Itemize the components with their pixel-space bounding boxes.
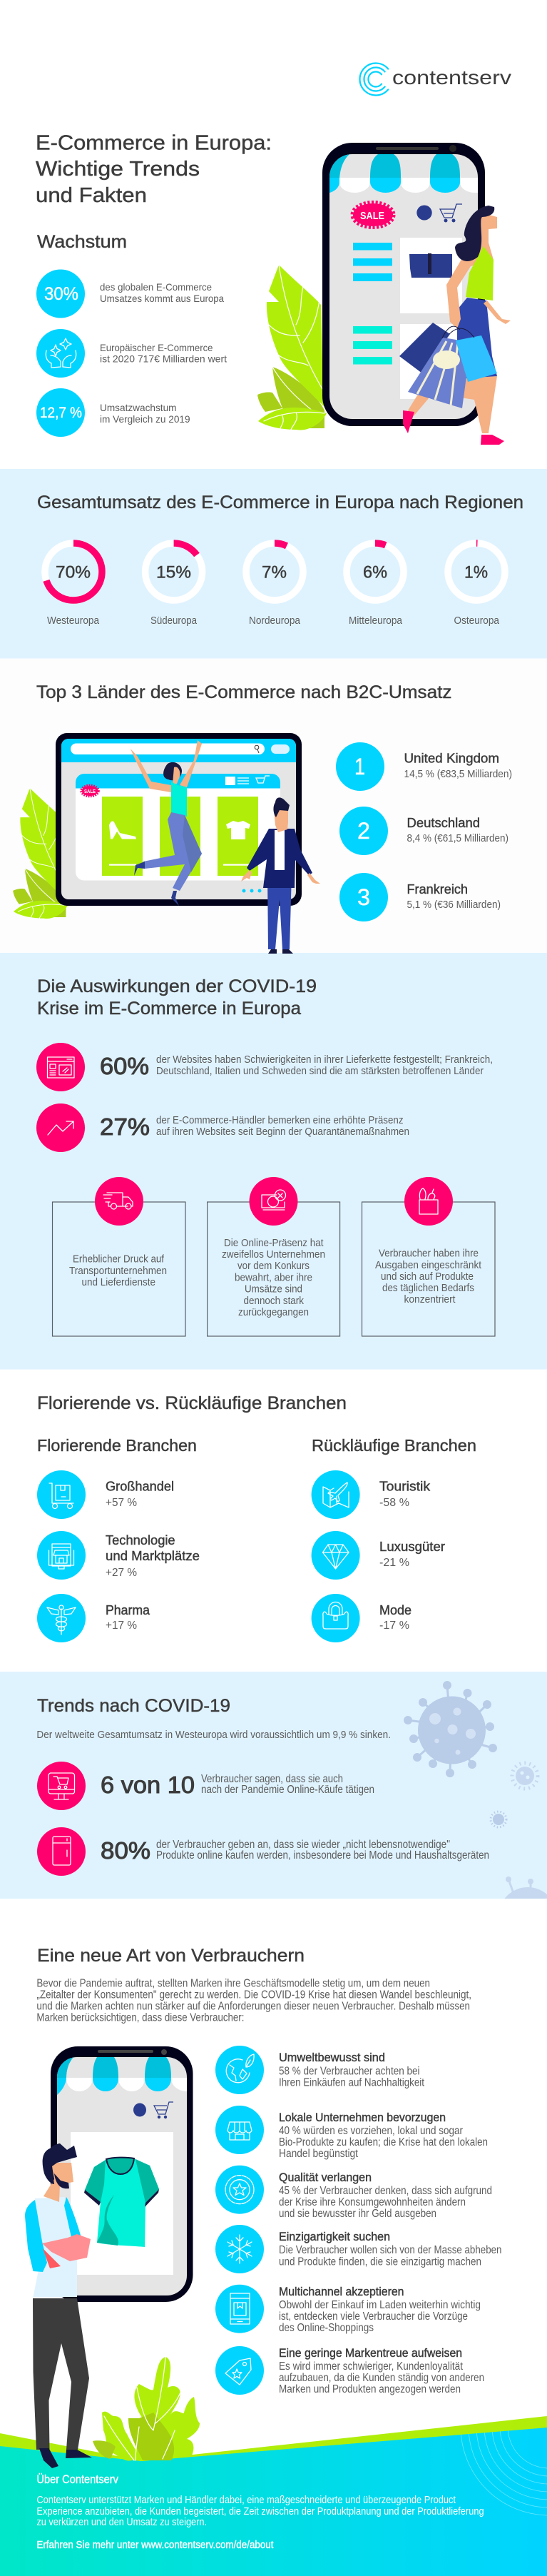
card: online presence: vor dem Konkurs [237,1260,310,1272]
rank: United Kingdom: United Kingdom [404,751,499,765]
stat: 60 percent: der Websites haben Schwierigkeiten in ihrer Lieferkette festgestellt; Frankreich, [156,1054,493,1066]
stat: 30 percent: des globalen E-Commerce [100,281,212,293]
stat: 80 percent [37,1827,489,1876]
reason: accept multichannel: ist, entdecken viele Verbraucher die Vorzüge [279,2310,468,2323]
reason: seek uniqueness [215,2225,502,2273]
title [36,131,272,207]
icon: rising trend [48,1121,73,1135]
stat: 60 percent [36,1043,493,1091]
reason: environmentally aware: Umweltbewusst sind [279,2051,385,2064]
title: und Fakten [36,184,147,207]
reason: seek uniqueness: Einzigartigkeit suchen [279,2230,390,2243]
reason: local businesses: Handel begünstigt [279,2148,359,2160]
text: intro paragraph [36,1978,471,2024]
heading: COVID-19 impact: Die Auswirkungen der COVID-19 [37,976,317,996]
reason: low brand loyalty: Marken und Produkten angezogen werden [279,2383,461,2395]
icon: website [47,1057,74,1078]
rank: United Kingdom: 1 [354,754,365,779]
panel: thriving vs declining sectors [37,1393,476,1642]
illustration: phone with t-shirt [51,2046,193,2302]
stat: 60 percent: Deutschland, Italien und Schweden sind die am stärksten betroffenen Länder [156,1065,484,1077]
item: fashion: -17 % [379,1620,409,1632]
footer text: about Contentserv [36,2473,484,2551]
reason: environmentally aware: Ihren Einkäufen auf Nachhaltigkeit [279,2077,425,2089]
stat: 30 percent [36,270,224,318]
text: intro paragraph: Bevor die Pandemie auftrat, stellten Marken ihre Geschäftsmodelle stetig um, um dem neuen [36,1978,430,1990]
reason: demand quality: und sie bewusster ihr Geld ausgeben [279,2208,436,2220]
reason: demand quality: der Krise ihre Konsumgewohnheiten ändern [279,2196,466,2208]
panel: COVID-19 impact [0,953,547,1370]
heading: top 3 countries: Top 3 Länder des E-Commerce nach B2C-Umsatz [36,682,452,702]
donut: Südeuropa 15 percent [145,543,203,627]
footer text: about Contentserv: zu verkürzen und den Umsatz zu steigern. [36,2516,207,2528]
card: transport pressure: und Lieferdienste [81,1276,155,1288]
item: wholesale [37,1470,174,1519]
stat: 30 percent: Umsatzes kommt aus Europa [100,293,224,304]
donut: Mitteleuropa 6 percent: 6% [363,562,387,582]
item: technology and marketplaces: +27 % [106,1567,137,1579]
donut: Westeuropa 70 percent: Westeuropa [47,615,100,627]
item: tourism [312,1470,431,1519]
donut: Mitteleuropa 6 percent [347,543,404,627]
item: pharma [37,1594,150,1642]
icon: price tag [225,2358,251,2385]
card: online presence: zweifellos Unternehmen [222,1248,325,1261]
card: transport pressure: Transportunternehmen [69,1265,167,1277]
card: online presence: dennoch stark [244,1295,304,1307]
reason: environmentally aware: 58 % der Verbraucher achten bei [279,2066,419,2078]
item: technology and marketplaces: und Marktplätze [106,1549,200,1563]
text: intro paragraph: Marken berücksichtigen, dass diese Verbraucher: [36,2012,244,2024]
item: technology and marketplaces: Technologie [106,1533,175,1547]
stat: 12,7 percent: Umsatzwachstum [100,402,177,413]
reason: environmentally aware [215,2046,425,2094]
icon: grocery bag [419,1188,438,1214]
heading: COVID-19 impact: Krise im E-Commerce in Europa [37,999,301,1019]
icon: snowflake [228,2235,252,2263]
stat: 12,7 percent: im Vergleich zu 2019 [100,413,190,425]
illustration: online shop tablet: SALE [84,788,96,794]
illustration: leaves behind the tablet [13,788,68,919]
reason: accept multichannel [215,2285,481,2334]
stat: 6 of 10 [37,1762,374,1810]
subheading: declining sectors: Rückläufige Branchen [312,1436,476,1455]
donut: Nordeuropa 7 percent [246,543,303,627]
card: online presence: Die Online-Präsenz hat [224,1237,324,1249]
stat: 717 billion: ist 2020 717€ Milliarden wert [100,353,227,364]
heading: new kind of consumer: Eine neue Art von Verbrauchern [37,1946,305,1966]
footer text: about Contentserv: Erfahren Sie mehr unter www.contentserv.com/de/about [36,2539,274,2551]
illustration: shop phone [322,143,485,426]
text: revenue forecast: Der weltweite Gesamtumsatz in Westeuropa wird voraussichtlich um 9,9 % sinken. [36,1729,391,1741]
reason: seek uniqueness: Die Verbraucher wollen sich von der Masse abheben [279,2244,502,2256]
icon: hands and stars [46,338,76,368]
rank: Frankreich: 3 [357,884,370,910]
card: consumer spending: konzentriert [404,1293,456,1305]
stat: 80 percent: 80% [101,1837,150,1864]
donut: Westeuropa 70 percent [45,543,102,627]
stat: 12,7 percent: 12,7 % [40,405,82,421]
stat: 80 percent: der Verbraucher geben an, dass sie wieder „nicht lebensnotwendige" [156,1839,450,1851]
rank: Deutschland [339,807,508,855]
card: online presence: Umsätze sind [245,1283,302,1295]
stat: 27 percent [36,1103,409,1152]
footer: gradient background with lime edge [0,2416,547,2576]
title: Wichtige Trends [36,158,200,181]
panel: top 3 countries [0,658,547,954]
stat: 12,7 percent [36,388,190,437]
item: technology and marketplaces [37,1531,200,1580]
illustration: man with crossed arms [25,2143,92,2468]
reason: demand quality [215,2166,492,2220]
stat: 27 percent: der E-Commerce-Händler bemerken eine erhöhte Präsenz [156,1114,404,1126]
stat: 6 of 10: nach der Pandemie Online-Käufe tätigen [201,1784,374,1796]
stat: 717 billion: Europäischer E-Commerce [100,342,213,353]
item: pharma: Pharma [106,1603,150,1617]
reason: accept multichannel: des Online-Shoppings [279,2322,374,2334]
card: online presence [208,1177,340,1336]
card: transport pressure [53,1177,185,1336]
logo: contentserv: contentserv [392,66,511,89]
reason: seek uniqueness: und Produkte finden, die sie einzigartig machen [279,2256,481,2268]
subheading: thriving sectors: Florierende Branchen [37,1436,197,1455]
item: luxury goods: Luxusgüter [379,1540,445,1554]
stat: 60 percent: 60% [100,1053,149,1079]
illustration: online shop tablet [56,733,302,906]
card: consumer spending: und sich auf Produkte [381,1271,474,1283]
icon: money with cross [262,1190,285,1210]
item: wholesale: +57 % [106,1497,137,1509]
text: intro paragraph: und die Marken achten nun stärker auf die Anforderungen dieser neuen Verbraucher. Deshalb müssen [36,2001,470,2013]
illustration: woman with shopping bags [399,206,511,445]
reason: low brand loyalty: Eine geringe Markentreue aufweisen [279,2346,462,2360]
card: transport pressure: Erheblicher Druck auf [73,1253,165,1266]
donut: Osteuropa 1 percent [448,543,505,627]
rank: Deutschland: Deutschland [407,816,480,830]
footer text: about Contentserv: Über Contentserv [36,2473,118,2486]
rank: Frankreich [339,873,501,921]
rank: Frankreich: Frankreich [407,882,468,896]
heading: COVID-19 impact [37,976,317,1019]
illustration: shop phone: SALE [360,210,384,222]
donut: Nordeuropa 7 percent: Nordeuropa [249,615,301,627]
icon: globe with leaf [226,2054,254,2083]
card: consumer spending: des täglichen Bedarfs [382,1282,474,1294]
item: tourism: -58 % [379,1497,409,1509]
item: pharma: +17 % [106,1620,137,1632]
card: consumer spending [362,1177,495,1336]
donut: Südeuropa 15 percent: Südeuropa [150,615,198,627]
reason: low brand loyalty: Es wird immer schwieriger, Kundenloyalität [279,2360,464,2373]
stat: 80 percent: Produkte online kaufen werden, insbesondere bei Mode und Haushaltsgeräten [156,1849,489,1862]
footer text: about Contentserv: Experience anzubieten, die Kunden begeistert, die Zeit zwischen der Produktplanung und der Produktlieferung [36,2505,484,2517]
stat: 717 billion [36,329,227,378]
reason: demand quality: 45 % der Verbraucher denken, dass sich aufgrund [279,2185,492,2197]
stat: 6 of 10: Verbraucher sagen, dass sie auch [201,1773,343,1785]
rank: Frankreich: 5,1 % (€36 Milliarden) [407,899,501,911]
reason: local businesses [215,2106,488,2160]
panel: revenue by region [0,469,547,658]
item: luxury goods [312,1531,445,1580]
stat: 30 percent: 30% [44,284,78,304]
illustration: standing man [241,797,320,954]
reason: local businesses: Lokale Unternehmen bevorzugen [279,2111,446,2124]
rank: United Kingdom [336,742,512,791]
donut: Osteuropa 1 percent: Osteuropa [454,615,500,627]
card: consumer spending: Ausgaben eingeschränkt [375,1259,482,1271]
rank: United Kingdom: 14,5 % (€83,5 Milliarden) [404,768,512,780]
text: intro paragraph: „Zeitalter der Konsumenten" gerecht zu werden. Die COVID-19 Krise hat diesen Wandel beschleunigt, [36,1989,471,2001]
heading: revenue by region: Gesamtumsatz des E-Commerce in Europa nach Regionen [37,493,523,512]
icon: smartphone with bookmark [230,2293,250,2324]
logo: contentserv [359,63,511,96]
stat: 27 percent: 27% [100,1113,150,1140]
heading: trends after COVID-19: Trends nach COVID-19 [37,1696,230,1716]
reason: demand quality: Qualität verlangen [279,2171,372,2184]
reason: low brand loyalty: aufzubauen, da die Kunden ständig von anderen [279,2372,484,2384]
illustration: bush [93,2357,200,2461]
reason: accept multichannel: Obwohl der Einkauf im Laden weiterhin wichtig [279,2299,481,2311]
heading: Wachstum: Wachstum [37,232,127,252]
reason: low brand loyalty [215,2346,484,2395]
reason: local businesses: 40 % würden es vorziehen, lokal und sogar [279,2125,463,2137]
donut: Westeuropa 70 percent: 70% [56,562,91,582]
icon: delivery truck [103,1193,133,1209]
item: fashion: Mode [379,1603,411,1617]
item: wholesale: Großhandel [106,1480,174,1494]
reason: local businesses: Bio-Produkte zu kaufen; die Krise hat den lokalen [279,2136,488,2148]
icon: storefront [228,2122,252,2140]
illustration: jumping woman [131,740,202,906]
rank: Deutschland: 8,4 % (€61,5 Milliarden) [407,832,508,844]
panel: trends after COVID-19 [0,1672,547,1899]
item: fashion [312,1594,411,1642]
card: online presence: bewahrt, aber ihre [235,1272,312,1284]
reason: accept multichannel: Multichannel akzeptieren [279,2285,404,2298]
icon: monitor with cart [48,1773,75,1799]
illustration: viruses [404,1681,547,1899]
icon: fridge [53,1837,71,1865]
heading: thriving vs declining sectors: Florierende vs. Rückläufige Branchen [37,1393,347,1413]
donut: Osteuropa 1 percent: 1% [464,562,488,582]
card: online presence: zurückgegangen [238,1306,309,1318]
rank: Deutschland: 2 [357,818,370,844]
stat: 6 of 10: 6 von 10 [101,1772,195,1798]
item: luxury goods: -21 % [379,1557,409,1569]
donut: Mitteleuropa 6 percent: Mitteleuropa [349,615,403,627]
donut: Südeuropa 15 percent: 15% [156,562,191,582]
donut: Nordeuropa 7 percent: 7% [262,562,287,582]
stat: 27 percent: auf ihren Websites seit Beginn der Quarantänemaßnahmen [156,1126,409,1138]
item: tourism: Touristik [379,1480,431,1494]
title: E-Commerce in Europa: [36,131,272,154]
footer text: about Contentserv: Contentserv unterstützt Marken und Händler dabei, eine maßgeschneiderte und überzeugende Product [36,2494,456,2506]
icon: quality badge [225,2176,254,2204]
card: consumer spending: Verbraucher haben ihre [379,1248,479,1259]
illustration: leaves behind the phone [257,265,327,430]
